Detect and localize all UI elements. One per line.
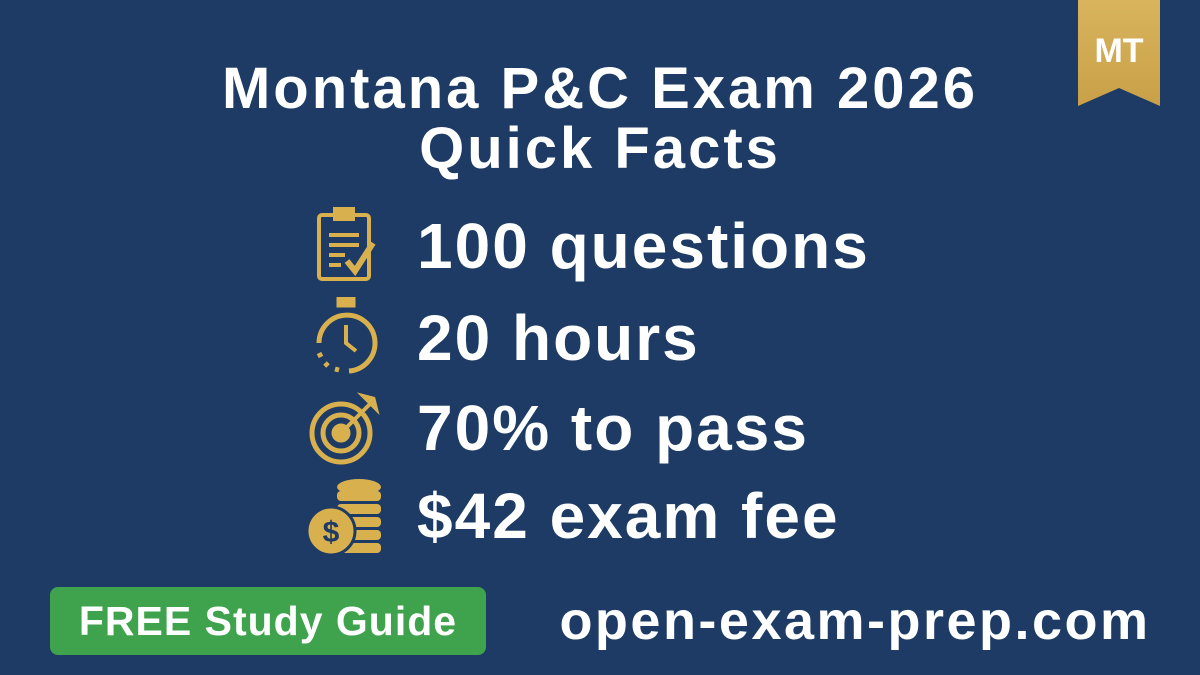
badge: MT — [1078, 0, 1160, 106]
title: Montana P&C Exam 2026 — [222, 56, 978, 121]
fact: hours — [316, 297, 700, 374]
icon: clipboard — [317, 207, 376, 281]
icon: target — [310, 392, 380, 464]
button: free study guide — [50, 587, 486, 655]
fact: pass: 70% to pass — [417, 392, 809, 464]
fact: hours: 20 hours — [417, 302, 700, 374]
fact: fee: $42 exam fee — [417, 480, 840, 552]
fact: questions: 100 questions — [417, 210, 870, 282]
icon: coins: $ — [323, 516, 340, 549]
button: free study guide: FREE Study Guide — [79, 598, 457, 644]
subtitle: Quick Facts — [419, 116, 781, 181]
url: open-exam-prep.com — [559, 591, 1151, 651]
badge: MT: MT — [1094, 32, 1144, 70]
icon: stopwatch — [316, 297, 378, 374]
icon: coins — [308, 479, 381, 554]
